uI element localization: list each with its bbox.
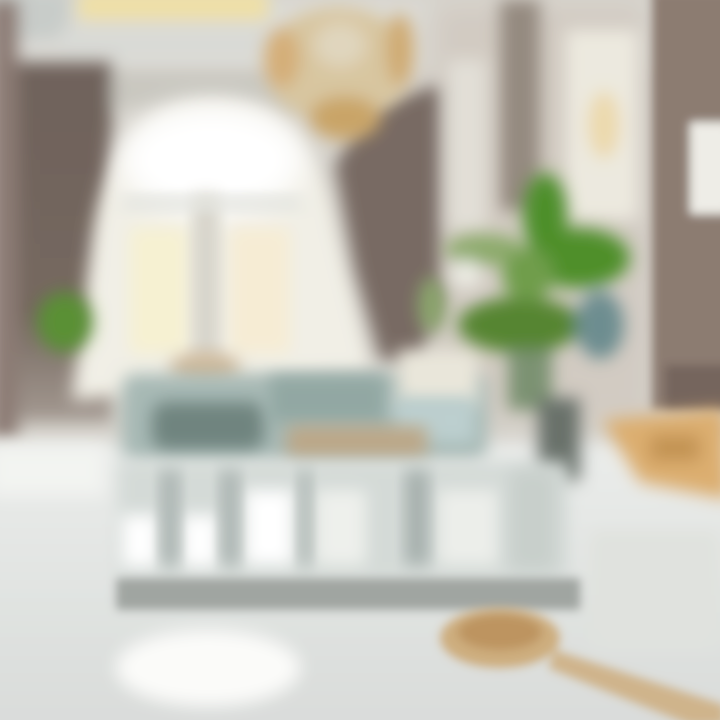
glass table base <box>118 462 568 578</box>
floor <box>0 442 720 720</box>
center curtain <box>335 0 540 365</box>
sofa <box>122 350 487 460</box>
wooden side table <box>602 408 720 500</box>
right dark wall <box>652 0 720 411</box>
wooden tray and handle <box>440 608 720 720</box>
large plant <box>418 173 630 480</box>
small plant left <box>37 292 93 352</box>
chandelier <box>264 7 414 140</box>
table shelf bar <box>116 578 581 610</box>
ceiling light <box>0 0 270 58</box>
arched window <box>72 100 370 400</box>
left curtain <box>0 0 342 440</box>
floor reflection <box>116 530 720 706</box>
wall picture <box>566 30 638 220</box>
